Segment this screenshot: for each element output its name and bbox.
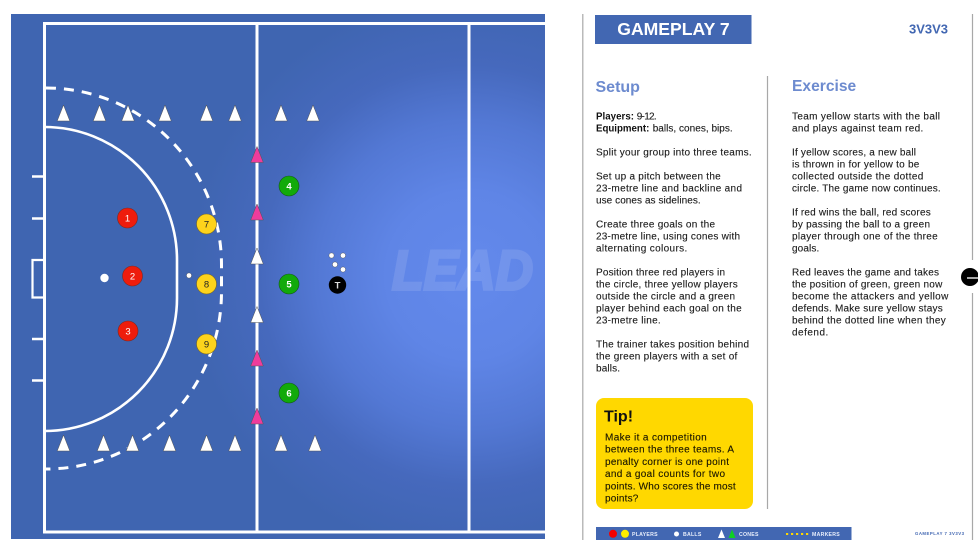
text block: setup: the circle, three yellow players [596, 280, 738, 290]
panel borders [583, 14, 972, 540]
cones: top row [57, 105, 319, 121]
green players: 5 [286, 280, 292, 290]
text block: setup: Equipment: [596, 124, 649, 134]
green players: 6 [286, 388, 292, 400]
text block: exercise: If red wins the ball, red scores [792, 208, 931, 218]
text block: setup: The trainer takes position behind [596, 340, 749, 350]
text block: exercise: by passing the ball to a green [792, 220, 930, 230]
text block: setup: 23-metre line. [596, 316, 661, 326]
text block: exercise: goals. [792, 244, 819, 254]
text block: setup: Position three red players in [596, 268, 725, 278]
text block: exercise: the position of green, green now [792, 280, 943, 290]
text block: setup: player behind each goal on the [596, 304, 742, 314]
text block: setup: Set up a pitch between the [596, 172, 721, 182]
text block: exercise: circle. The game now continues. [792, 184, 941, 194]
yellow players: 9 [204, 340, 209, 350]
heading: Setup: Setup [596, 79, 640, 96]
text block: exercise: Team yellow starts with the ball [792, 112, 940, 122]
text block: setup: use cones as sidelines. [596, 196, 701, 206]
callout: tip: penalty corner is one point [605, 457, 729, 468]
footer label: GAMEPLAY 7 3V3V3 [915, 531, 965, 536]
text block: setup: 23-metre line, using cones with [596, 232, 740, 242]
text block: exercise [792, 112, 949, 338]
icon: page tab marker [961, 268, 978, 286]
text block: exercise: Red leaves the game and takes [792, 268, 939, 278]
cones: bottom row [57, 435, 321, 451]
text block: exercise: become the attackers and yellow [792, 292, 949, 302]
text block: exercise: behind the dotted line when they [792, 316, 946, 326]
callout: tip [596, 398, 753, 509]
text block: setup: 23-metre line and backline and [596, 184, 742, 194]
balls [100, 253, 346, 282]
legend bar: BALLS [683, 532, 702, 538]
text block: setup: alternating colours. [596, 244, 687, 254]
callout: tip: points. Who scores the most [605, 481, 736, 492]
panel: hockey pitch [11, 14, 545, 539]
text block: exercise: defends. Make sure yellow stays [792, 304, 943, 314]
text block: exercise: player through one of the three [792, 232, 938, 242]
trainer: T [335, 280, 341, 292]
text block: setup: balls. [596, 364, 620, 374]
callout: tip: and a goal counts for two [605, 469, 725, 480]
heading: Exercise: Exercise [792, 78, 856, 95]
text block: setup: Players: [596, 112, 634, 122]
green players: 4 [286, 182, 292, 192]
subtitle: 3V3V3: 3V3V3 [909, 22, 948, 36]
red players: 1 [125, 214, 130, 224]
yellow players: 8 [204, 280, 209, 290]
text block: exercise: and plays against team red. [792, 124, 923, 134]
text block: setup: 9-12. [637, 112, 657, 122]
legend bar: MARKERS [812, 532, 840, 538]
text block: setup: outside the circle and a green [596, 292, 735, 302]
legend bar [596, 527, 852, 540]
text block: exercise: is thrown in for yellow to be [792, 160, 920, 170]
pitch lines [32, 24, 545, 532]
pitch background [11, 14, 545, 539]
text block: exercise: collected outside the dotted [792, 172, 923, 182]
callout: tip: between the three teams. A [605, 445, 734, 456]
text block: setup: the green players with a set of [596, 352, 738, 362]
legend bar: PLAYERS [632, 532, 658, 538]
red players [118, 208, 142, 341]
title banner [595, 15, 752, 44]
column divider [766, 76, 768, 509]
yellow players [196, 214, 216, 354]
text block: setup: balls, cones, bips. [653, 124, 733, 134]
text block: exercise: If yellow scores, a new ball [792, 148, 916, 158]
title banner: GAMEPLAY 7 [617, 19, 730, 39]
text block: setup [596, 112, 752, 374]
text block: setup: Split your group into three teams. [596, 148, 752, 158]
text block: exercise: defend. [792, 328, 828, 338]
yellow players: 7 [204, 220, 209, 230]
callout: tip: points? [605, 494, 639, 505]
watermark: LEAD logo: LEAD [392, 238, 533, 302]
cones: goals on 23-metre line [251, 146, 263, 424]
callout: tip: Tip! [604, 408, 633, 426]
legend bar: CONES [739, 532, 759, 538]
red players: 3 [125, 326, 131, 338]
text block: setup: Create three goals on the [596, 220, 715, 230]
trainer [329, 276, 346, 294]
callout: tip: Make it a competition [605, 432, 707, 444]
red players: 2 [130, 272, 135, 282]
green players [279, 176, 299, 403]
